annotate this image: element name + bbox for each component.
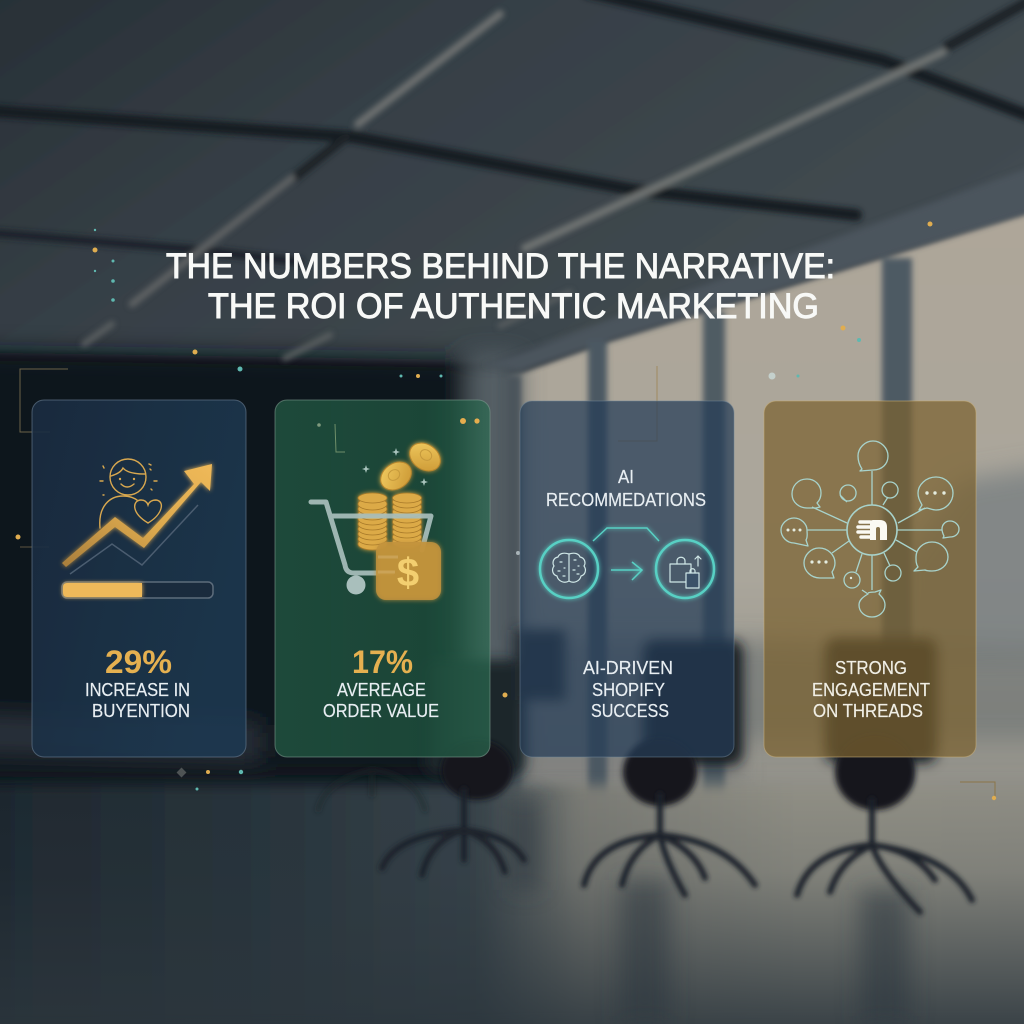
icon: smiling person with heart and rising arrow: [62, 459, 212, 574]
icon: shopping cart with gold coins and dollar tile: [311, 418, 480, 600]
decorative brackets and particles: [16, 222, 996, 800]
label: average order value: AVEREAGE: [337, 679, 426, 700]
statistic: 29%: 29%: [105, 644, 172, 680]
label: strong engagement on threads: [812, 657, 930, 721]
label: increase in buyention: INCREASE IN: [85, 679, 190, 700]
statistic: 17%: 17%: [352, 644, 413, 680]
label: AI-driven Shopify success: SHOPIFY: [592, 679, 665, 700]
heading: AI recommedations: RECOMMEDATIONS: [546, 489, 706, 510]
label: strong engagement on threads: ON THREADS: [813, 700, 923, 721]
diagram: brain to shopping bags flow: [540, 528, 714, 598]
floor: [0, 785, 1024, 1024]
label: AI-driven Shopify success: [583, 657, 673, 721]
panel: 17% average order value card: [275, 400, 490, 757]
heading: AI recommedations: AI: [618, 466, 634, 487]
label: AI-driven Shopify success: SUCCESS: [591, 700, 669, 721]
label: strong engagement on threads: STRONG: [835, 657, 907, 678]
panel: 29% increase card: [32, 400, 246, 757]
heading: AI recommedations: [546, 466, 706, 510]
progress bar: [62, 582, 213, 598]
label: AI-driven Shopify success: AI-DRIVEN: [583, 657, 673, 678]
label: increase in buyention: [85, 679, 190, 721]
label: average order value: ORDER VALUE: [323, 700, 439, 721]
icon: shopping cart with gold coins and dollar tile: $: [397, 551, 419, 595]
label: strong engagement on threads: ENGAGEMENT: [812, 679, 930, 700]
title: THE ROI OF AUTHENTIC MARKETING: [208, 287, 819, 326]
icon: speech bubble network around logo: [781, 441, 959, 617]
label: average order value: [323, 679, 439, 721]
title: [166, 247, 835, 326]
label: increase in buyention: BUYENTION: [92, 700, 190, 721]
panel: AI-driven Shopify success card: [520, 401, 734, 757]
panel: strong engagement on threads card: [764, 401, 976, 757]
title: THE NUMBERS BEHIND THE NARRATIVE:: [166, 247, 835, 286]
